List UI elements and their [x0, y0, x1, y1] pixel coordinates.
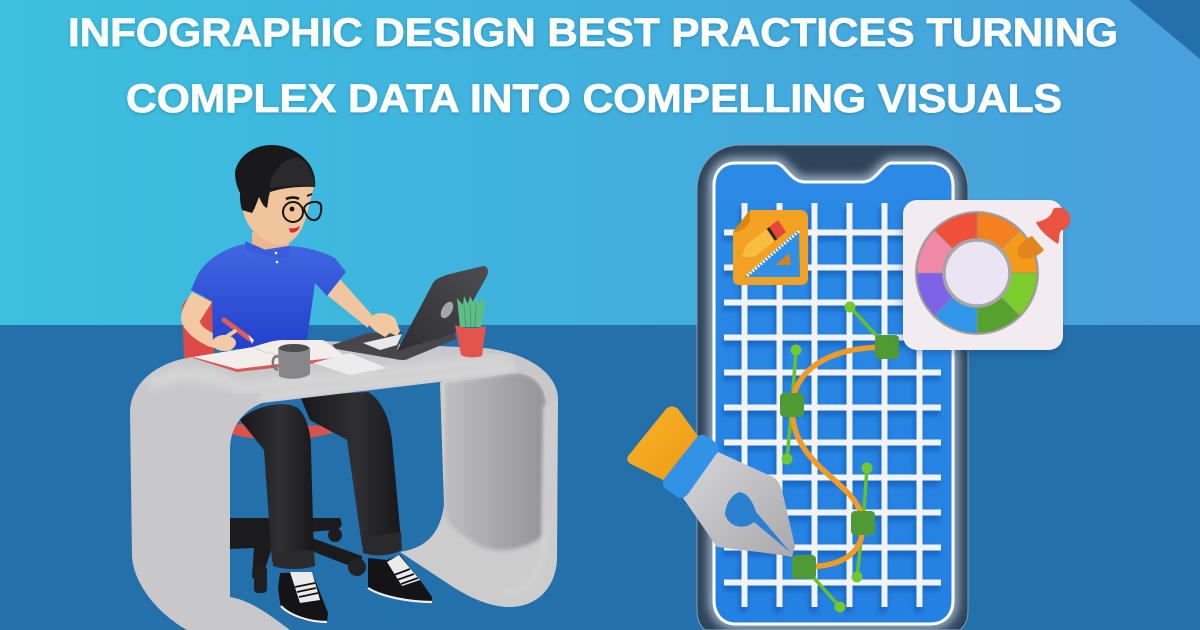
illustration: designer at desk	[130, 145, 558, 630]
color wheel card	[903, 200, 1070, 350]
chair	[182, 296, 366, 593]
right arm	[327, 279, 372, 328]
bezier curve	[780, 302, 899, 612]
dropper	[1017, 208, 1070, 259]
phone body	[697, 145, 968, 630]
desk back panel	[400, 348, 558, 607]
plant	[455, 296, 486, 357]
hair	[235, 145, 315, 213]
wheel segments	[917, 213, 1037, 333]
shirt	[191, 244, 346, 349]
left arm	[181, 292, 238, 351]
shoes	[278, 555, 432, 623]
typing hand	[367, 313, 400, 337]
laptop	[332, 266, 488, 360]
illustration: phone design app	[627, 145, 1070, 630]
desk shading	[162, 430, 218, 620]
neck	[252, 232, 290, 252]
book	[193, 340, 345, 372]
title	[68, 11, 1118, 121]
legs	[240, 392, 402, 569]
mouth	[289, 226, 300, 233]
eye and brow	[286, 194, 312, 211]
desk front and top	[130, 340, 558, 630]
ruler and pencil icon	[733, 210, 808, 285]
title line 1: INFOGRAPHIC DESIGN BEST PRACTICES TURNING	[68, 11, 1118, 55]
collar	[245, 241, 290, 258]
pen nib	[627, 406, 795, 557]
grid	[723, 203, 941, 612]
mug	[273, 344, 310, 379]
title line 2: COMPLEX DATA INTO COMPELLING VISUALS	[126, 77, 1062, 121]
body	[181, 145, 372, 351]
glasses	[283, 202, 321, 222]
head	[242, 186, 314, 245]
inner panel shading	[443, 373, 546, 550]
paper	[313, 353, 387, 375]
left hand and pencil	[212, 320, 254, 351]
